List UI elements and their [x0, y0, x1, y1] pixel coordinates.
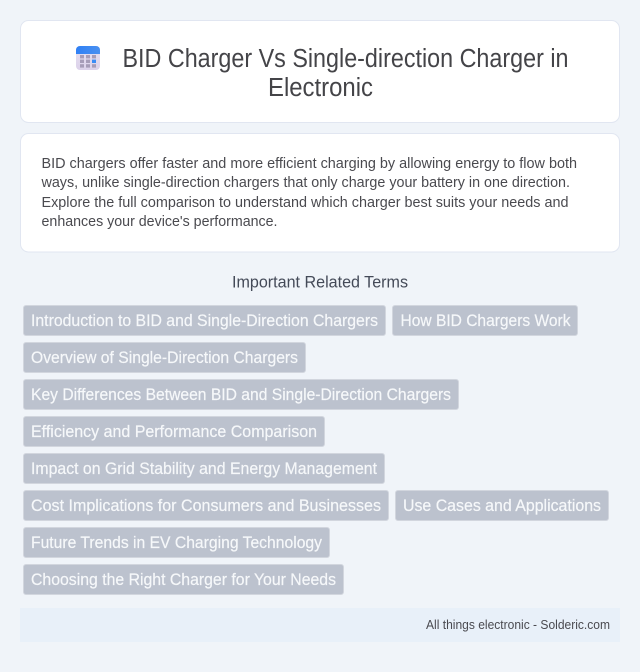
tag: introduction: [24, 306, 386, 336]
tag: efficiency: Efficiency and Performance Comparison: [31, 422, 317, 441]
tag: how BID chargers work: [392, 306, 578, 336]
panel: intro paragraph: Explore the full comparison to understand which charger best suits your needs and: [42, 194, 568, 211]
tag: key differences: Key Differences Between BID and Single-Direction Chargers: [31, 385, 451, 404]
tag: future trends: Future Trends in EV Charging Technology: [31, 533, 322, 552]
tag: cost implications: [24, 490, 388, 520]
tag: future trends: [24, 528, 330, 558]
tag: choosing the right charger: [24, 564, 344, 594]
tag: grid stability: Impact on Grid Stability and Energy Management: [31, 459, 377, 478]
tag list: [24, 306, 608, 594]
panel: intro paragraph: enhances your device's performance.: [42, 213, 278, 230]
title: [122, 45, 568, 102]
tag: how BID chargers work: How BID Chargers Work: [400, 311, 571, 330]
footer: [20, 608, 620, 642]
icon: calendar: [76, 46, 100, 70]
tag: overview: [24, 342, 306, 372]
tag: efficiency: [24, 416, 324, 446]
tag: use cases: Use Cases and Applications: [403, 496, 601, 515]
panel: intro paragraph: ways, unlike single-direction chargers that only charge your battery in one direction.: [41, 174, 570, 191]
panel: intro paragraph: BID chargers offer faster and more efficient charging by allowing energy to flow both: [42, 155, 577, 172]
panel: title card: [20, 20, 620, 122]
tag: key differences: [24, 380, 458, 410]
title: Electronic: [268, 74, 373, 102]
tag: overview: Overview of Single-Direction Chargers: [31, 348, 298, 367]
footer: All things electronic - Solderic.com: [426, 618, 610, 632]
panel: intro paragraph: [20, 134, 620, 252]
tag: cost implications: Cost Implications for Consumers and Businesses: [31, 496, 381, 515]
tag: grid stability: [24, 454, 384, 484]
heading: important related terms: Important Related Terms: [232, 272, 408, 292]
tag: introduction: Introduction to BID and Single-Direction Chargers: [31, 311, 378, 330]
tag: use cases: [396, 490, 608, 520]
tag: choosing the right charger: Choosing the Right Charger for Your Needs: [31, 570, 336, 589]
title: BID Charger Vs Single-direction Charger in: [122, 45, 568, 73]
